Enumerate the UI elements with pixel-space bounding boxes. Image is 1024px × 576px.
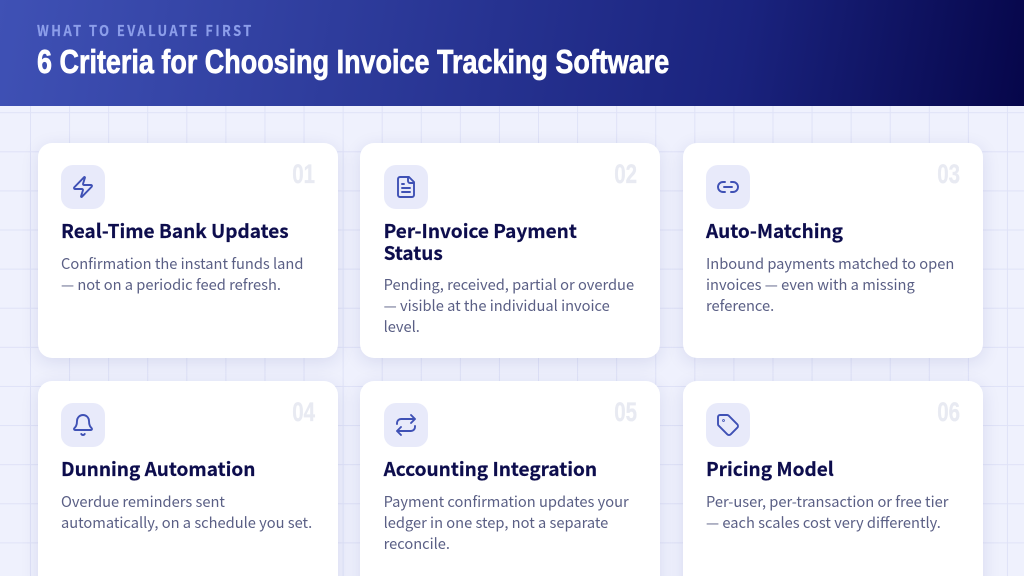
description: Confirmation the instant funds land bbox=[61, 253, 303, 274]
description: Pending, received, partial or overdue bbox=[384, 274, 634, 295]
heading: Real-Time Bank Updates bbox=[61, 217, 289, 244]
description: — visible at the individual invoice bbox=[384, 295, 610, 316]
number 03: 03 bbox=[937, 159, 960, 189]
number 06: 06 bbox=[937, 397, 960, 427]
description: ledger in one step, not a separate bbox=[384, 512, 608, 533]
number 01: 01 bbox=[292, 159, 315, 189]
description bbox=[706, 491, 948, 533]
description: Inbound payments matched to open bbox=[706, 253, 954, 274]
icon: price tag bbox=[706, 403, 750, 447]
heading: Accounting Integration bbox=[384, 455, 597, 482]
description: Payment confirmation updates your bbox=[384, 491, 629, 512]
description bbox=[384, 491, 629, 554]
panel: card 04 dunning automation bbox=[38, 381, 338, 576]
description: Overdue reminders sent bbox=[61, 491, 225, 512]
eyebrow label: WHAT TO EVALUATE FIRST bbox=[37, 20, 254, 41]
description: — each scales cost very differently. bbox=[706, 512, 941, 533]
icon: bell bbox=[61, 403, 105, 447]
panel: card 05 accounting integration bbox=[360, 381, 660, 576]
panel: card 03 auto-matching bbox=[683, 143, 983, 358]
panel: card 06 pricing model bbox=[683, 381, 983, 576]
description: automatically, on a schedule you set. bbox=[61, 512, 312, 533]
description: level. bbox=[384, 316, 420, 337]
icon: lightning bolt bbox=[61, 165, 105, 209]
icon: swap arrows bbox=[384, 403, 428, 447]
panel: card 02 per-invoice payment status bbox=[360, 143, 660, 358]
heading bbox=[384, 217, 577, 266]
heading: Per-Invoice Payment bbox=[384, 217, 577, 244]
description: reference. bbox=[706, 295, 774, 316]
number 02: 02 bbox=[614, 159, 637, 189]
description bbox=[61, 253, 303, 295]
number 05: 05 bbox=[614, 397, 637, 427]
heading: Status bbox=[384, 238, 443, 266]
description bbox=[706, 253, 954, 316]
heading: Pricing Model bbox=[706, 455, 834, 482]
icon: document bbox=[384, 165, 428, 209]
description: — not on a periodic feed refresh. bbox=[61, 274, 281, 295]
description: Per-user, per-transaction or free tier bbox=[706, 491, 948, 512]
icon: link bbox=[706, 165, 750, 209]
description: invoices — even with a missing bbox=[706, 274, 915, 295]
description: reconcile. bbox=[384, 533, 450, 554]
description bbox=[384, 274, 634, 337]
description bbox=[61, 491, 312, 533]
heading: Dunning Automation bbox=[61, 455, 255, 482]
header banner bbox=[0, 0, 1024, 106]
heading: Auto-Matching bbox=[706, 217, 843, 244]
title: 6 Criteria for Choosing Invoice Tracking Software bbox=[37, 43, 669, 80]
number 04: 04 bbox=[292, 397, 315, 427]
panel: card 01 real-time bank updates bbox=[38, 143, 338, 358]
